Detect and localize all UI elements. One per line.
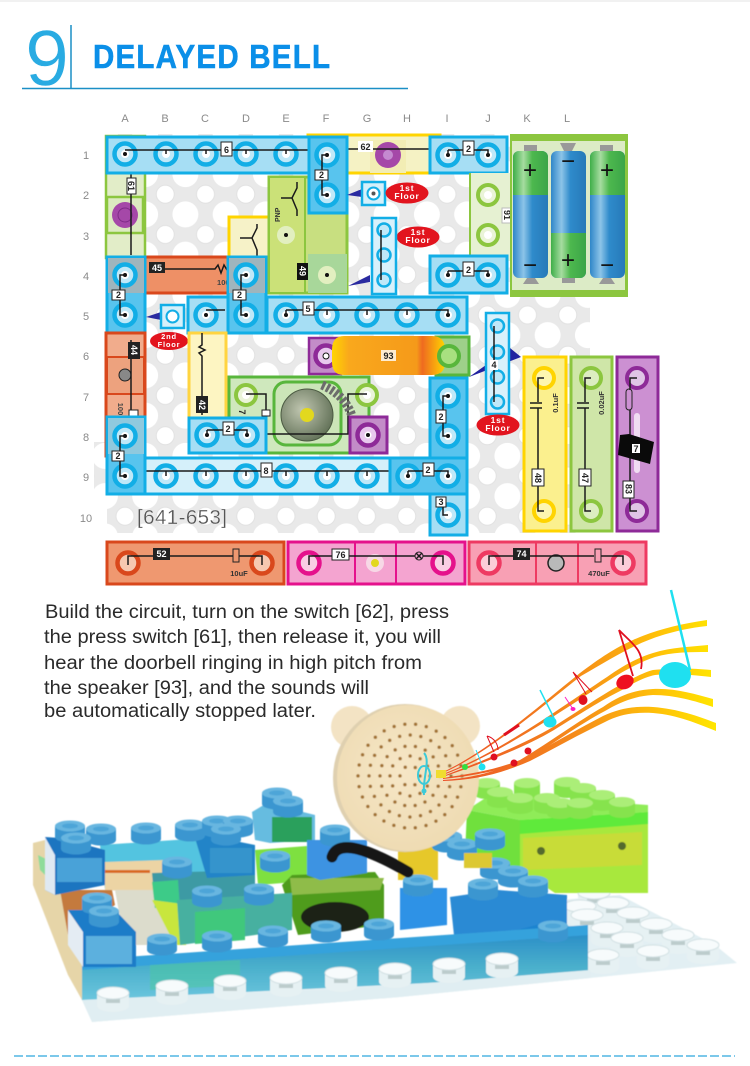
conductor 2 at C8-D8: 2	[225, 424, 231, 434]
battery left: +	[523, 157, 537, 184]
battery holder 91	[469, 134, 628, 297]
right blue blocks	[450, 890, 588, 977]
badge: 2nd floor: 2nd	[161, 332, 177, 341]
resistor 45	[143, 257, 236, 293]
battery middle	[551, 143, 586, 283]
lamp 76: 76	[335, 550, 346, 560]
instructions text: the press switch [61], then release it, you will	[44, 627, 441, 648]
buzzer 7	[229, 377, 377, 453]
green buzzer block	[282, 872, 384, 935]
orange part at A6-A8: 100Ω	[116, 403, 125, 421]
strip 8: 8	[263, 466, 269, 476]
column letters: D	[242, 113, 250, 125]
reed switch 83: 7	[633, 444, 639, 454]
row numbers: 10	[80, 513, 92, 525]
lamp 76	[288, 542, 465, 584]
strip 5	[267, 297, 467, 333]
badge: 2nd floor	[150, 332, 188, 350]
treble clef	[418, 753, 446, 795]
instructions text: hear the doorbell ringing in high pitch from	[44, 653, 422, 674]
clear studs right	[564, 887, 719, 974]
yellow stud	[464, 853, 492, 868]
conductor 2 at F1-F2	[309, 137, 347, 213]
row numbers: 1	[83, 150, 89, 162]
right cube	[400, 874, 447, 930]
row numbers: 3	[83, 231, 89, 243]
front-left block	[68, 910, 136, 967]
badge: 1st floor: 1st	[411, 227, 425, 237]
capacitor 52	[107, 542, 284, 584]
battery left	[513, 145, 548, 284]
battery middle: +	[561, 247, 575, 274]
conductor 2 at H9-I9: 2	[425, 465, 431, 475]
battery holder 91: 91	[502, 210, 512, 220]
reed switch 83	[617, 357, 658, 531]
badge: 1st floor	[386, 182, 428, 204]
board grid	[94, 134, 590, 533]
switch block	[307, 824, 367, 880]
instructions text: Build the circuit, turn on the switch [62], press	[45, 602, 449, 623]
speaker 93	[309, 336, 469, 375]
conductor 2 at D4-D5	[228, 257, 266, 333]
circuit diagram	[80, 113, 658, 584]
magnet part at H8	[350, 417, 387, 453]
battery left: −	[523, 252, 537, 279]
row numbers: 6	[83, 351, 89, 363]
column letters: I	[445, 113, 449, 125]
badge: 1st floor	[396, 226, 440, 248]
speaker holes	[358, 724, 462, 828]
transistor 49: 49	[298, 266, 308, 276]
socket at G2 with arrow	[347, 182, 385, 205]
clear pieces interior	[115, 890, 175, 945]
instructions text	[44, 602, 449, 722]
conductor 4 vertical with arrow: 4	[491, 360, 497, 370]
column letters: B	[161, 113, 169, 125]
capacitor 47	[571, 357, 612, 531]
title rule	[22, 25, 408, 88]
conductor 2 at I4-J4	[430, 256, 507, 293]
top strip 6	[107, 137, 347, 173]
row numbers: 5	[83, 311, 89, 323]
resistor 45: 100K	[217, 278, 236, 287]
strip 5: 5	[305, 304, 311, 314]
instructions text: be automatically stopped later.	[44, 701, 316, 722]
base clips	[82, 970, 590, 1022]
transistor 49	[269, 177, 347, 293]
staff lines	[443, 620, 716, 781]
strip C5	[188, 297, 229, 333]
badge: 1st floor: 1st	[491, 415, 505, 425]
conductor 2 at I1-J1	[430, 137, 507, 173]
conductor 2 at A4-A5: 2	[116, 290, 121, 300]
clear baseplate	[82, 895, 737, 1022]
capacitor 74	[469, 542, 646, 584]
section number: 9	[25, 13, 69, 102]
clear studs front	[97, 953, 518, 1012]
row numbers: 4	[83, 271, 89, 283]
mid blue-green block	[152, 870, 255, 908]
battery right: +	[600, 157, 614, 184]
column letters: A	[121, 113, 129, 125]
front wall	[82, 935, 588, 1000]
column letters: H	[403, 113, 411, 125]
badge: 2nd floor: Floor	[158, 340, 180, 349]
row numbers	[80, 150, 92, 525]
resistor 42: 42	[197, 400, 207, 410]
orange part at A6-A8	[106, 333, 145, 456]
resistor 42	[189, 333, 226, 421]
row numbers: 9	[83, 472, 89, 484]
badge: 1st floor: Floor	[485, 423, 511, 433]
speaker stand and back green	[255, 845, 320, 885]
conductor 2 at I4-J4: 2	[466, 265, 471, 275]
badge: 1st floor: Floor	[394, 191, 420, 201]
strip 8	[107, 458, 430, 494]
yellow-green slab	[152, 900, 190, 945]
column letters: K	[523, 113, 531, 125]
column letters: J	[485, 113, 491, 125]
capacitor 52: 10uF	[230, 569, 248, 578]
big note	[659, 590, 691, 688]
small notes	[462, 672, 592, 770]
arrow to C	[348, 275, 370, 286]
column letters: C	[201, 113, 209, 125]
battery right: −	[600, 252, 614, 279]
badge: 1st floor: 1st	[400, 183, 414, 193]
capacitor 74: 470uF	[588, 569, 610, 578]
press switch 61: 61	[126, 181, 136, 191]
capacitor 48: 48	[533, 473, 543, 483]
back wall	[100, 838, 212, 890]
low block	[177, 893, 292, 945]
heading: DELAYED BELL	[93, 38, 330, 75]
column letters: G	[363, 113, 371, 125]
conductor 2 at I7-I8	[430, 378, 467, 458]
row numbers: 2	[83, 190, 89, 202]
capacitor 48: 0.1uF	[551, 393, 560, 413]
buzzer 7: 7	[237, 409, 247, 415]
conductor 2 at A8-A9	[107, 417, 145, 494]
conductor 3 at I9-I10: 3	[438, 497, 444, 507]
conductor 2 at I1-J1: 2	[466, 144, 471, 154]
speaker 93: 93	[383, 351, 394, 361]
capacitor 74: 74	[516, 549, 527, 559]
switch 62: 62	[360, 142, 371, 152]
battery middle: −	[561, 148, 575, 175]
part range label: [641-653]	[137, 506, 227, 529]
conductor 2 at A8-A9: 2	[115, 451, 121, 461]
conductor 4 vertical with arrow	[469, 313, 521, 414]
reed switch 83: 83	[624, 484, 634, 494]
top hairline	[0, 0, 750, 2]
coil cord	[332, 848, 408, 872]
capacitor 47: 0.02uF	[597, 391, 606, 415]
yellow block	[398, 838, 438, 880]
spring	[322, 385, 352, 416]
switch 62	[308, 135, 440, 173]
row numbers: 7	[83, 392, 89, 404]
red note	[614, 630, 642, 692]
green battery pack	[465, 777, 648, 893]
conductor 2 at I7-I8: 2	[438, 412, 444, 422]
conductor 2 at H9-I9	[390, 458, 467, 494]
transistor yellow	[229, 217, 271, 259]
title block	[22, 13, 408, 102]
conductor 2 at A4-A5	[107, 257, 145, 333]
conductor 2 at F1-F2: 2	[319, 170, 324, 180]
column letters	[121, 113, 570, 125]
transistor 49: PNP	[275, 207, 282, 222]
conductor 3 at I9-I10	[430, 494, 467, 535]
row numbers: 8	[83, 432, 89, 444]
blue studs	[55, 788, 568, 956]
bottom dashed rule	[14, 1055, 735, 1057]
instructions text: the speaker [93], and the sounds will	[44, 678, 369, 699]
badge: 1st floor: Floor	[405, 235, 431, 245]
capacitor 48	[524, 357, 566, 531]
column letters: E	[282, 113, 290, 125]
column letters: F	[323, 113, 330, 125]
capacitor 47: 47	[580, 473, 590, 483]
conductor 2 at D4-D5: 2	[237, 290, 242, 300]
speaker head	[331, 704, 480, 852]
column letters: L	[564, 113, 570, 125]
product photo	[33, 704, 737, 1022]
press switch 61	[106, 136, 145, 258]
top strip 6: 6	[224, 145, 229, 155]
capacitor 52: 52	[156, 549, 167, 559]
orange part at A6-A8: 44	[129, 345, 139, 355]
badge: 1st floor	[476, 414, 520, 436]
left side wall	[33, 840, 82, 1000]
music notes and staff	[418, 590, 716, 795]
resistor 45: 45	[152, 263, 162, 273]
orange piece	[60, 890, 115, 935]
battery right	[590, 145, 625, 284]
conductor 2 at C8-D8	[189, 418, 266, 453]
blue blocks back	[45, 803, 315, 895]
socket at B5	[146, 305, 184, 328]
conductor 3 vertical	[372, 218, 396, 294]
